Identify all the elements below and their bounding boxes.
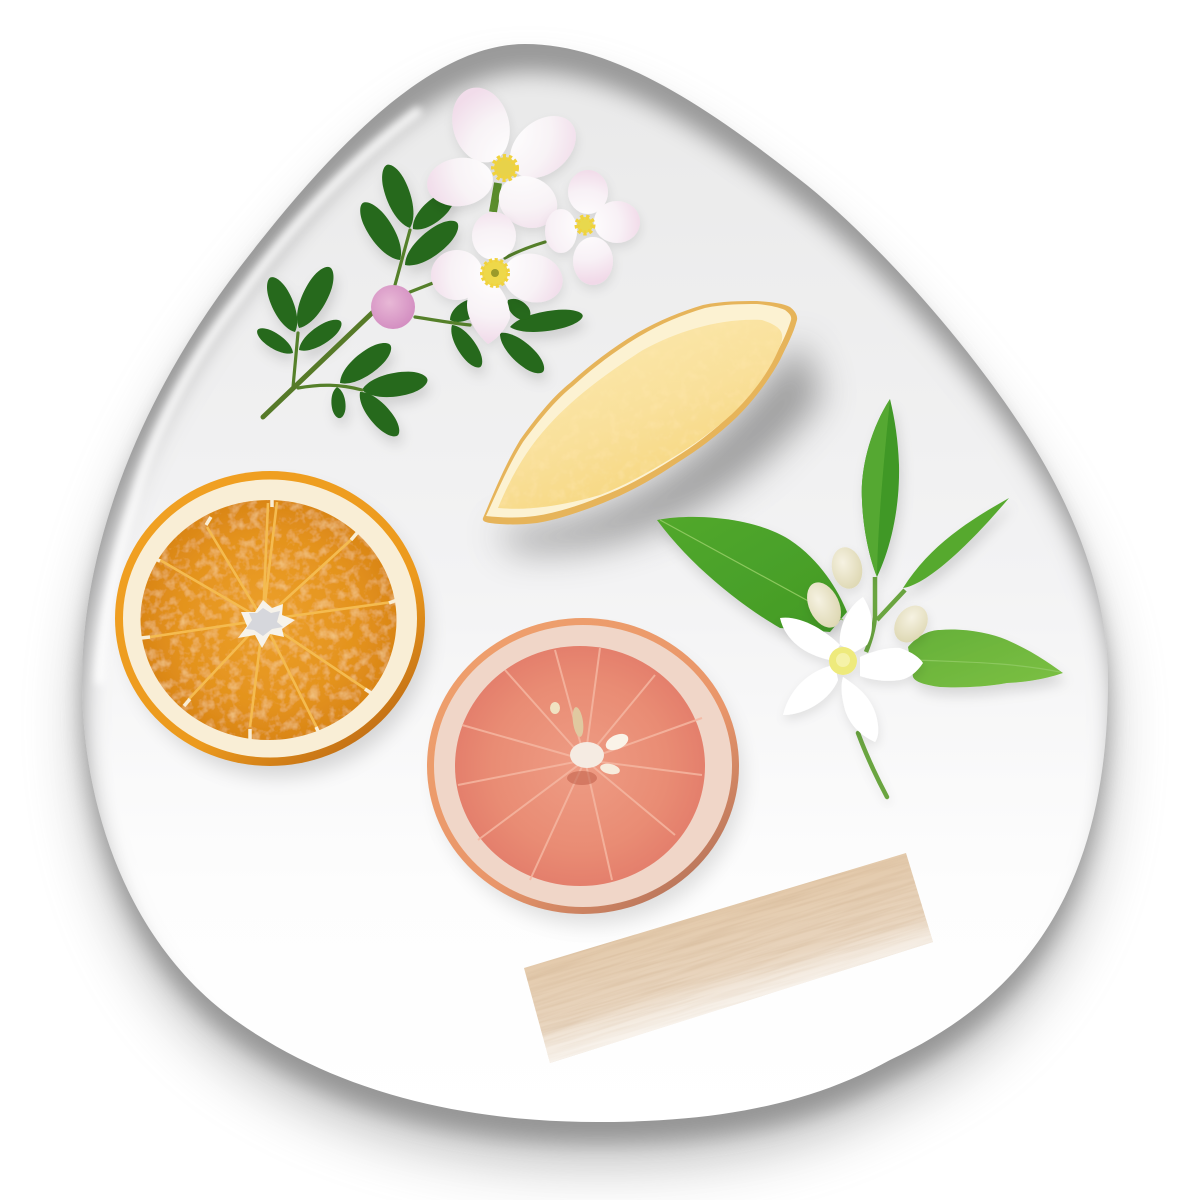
white flower (780, 597, 923, 742)
leaf: top (862, 399, 899, 577)
flower right (545, 170, 640, 285)
wood stick (524, 853, 933, 1063)
grapefruit shadow (438, 635, 742, 925)
wood grain (527, 870, 932, 1062)
plate drop shadow (82, 64, 1108, 1164)
rim highlight (100, 112, 417, 680)
flower top (424, 81, 588, 237)
flower lower (431, 212, 568, 344)
leaves (253, 161, 584, 442)
lemon wedge (483, 301, 822, 551)
orange shadow (128, 487, 428, 777)
green leaves (657, 399, 1063, 687)
plate (82, 44, 1108, 1122)
lemon shadow (495, 340, 822, 551)
pink bud (371, 285, 415, 329)
orange slice (115, 471, 428, 777)
orange blossom sprig (657, 399, 1063, 797)
buds (800, 544, 935, 649)
wood face (524, 853, 933, 1063)
leaf: narrow right (903, 498, 1009, 588)
stems (293, 230, 545, 390)
grapefruit slice (427, 618, 742, 925)
leaf: big left (657, 517, 847, 632)
stem (858, 577, 905, 797)
pink blossom sprig (253, 81, 640, 442)
leaf: right (908, 630, 1063, 687)
